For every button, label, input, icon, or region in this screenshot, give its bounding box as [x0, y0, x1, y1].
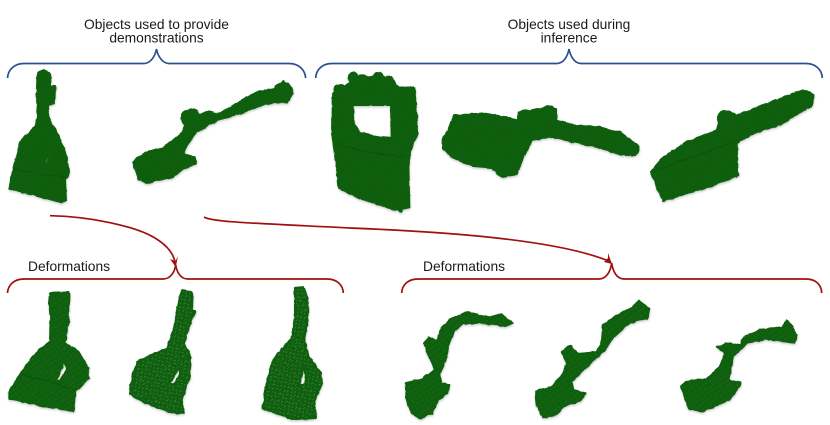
- object: inference tool right: [651, 90, 814, 201]
- title: objects used to provide demonstrations: demonstrations: [109, 30, 204, 46]
- object: demonstration flat tool: [134, 81, 293, 183]
- deformed bottle C: [263, 287, 322, 419]
- title: objects used during inference: inference: [541, 30, 598, 46]
- deformed bottle A: [9, 292, 89, 411]
- arrow: bottle to deformations: [50, 216, 178, 267]
- deformed bottle B: [130, 291, 194, 414]
- object: demonstration bottle: [9, 70, 69, 202]
- object: inference frame: [332, 72, 418, 213]
- object: inference tool middle: [443, 105, 640, 177]
- deformed tool D: [406, 312, 512, 419]
- deformed tool F: [681, 320, 797, 411]
- deformed tool E: [536, 301, 649, 417]
- arrow: tool to deformations: [204, 217, 612, 264]
- red bracket: left deformations: [8, 265, 343, 293]
- title: objects used during inference: Objects used during: [508, 17, 630, 32]
- blue bracket: demonstration objects: [8, 49, 306, 78]
- label: deformations right: Deformations: [423, 259, 505, 274]
- blue bracket: inference objects: [316, 49, 822, 78]
- red bracket: right deformations: [402, 263, 822, 293]
- label: deformations left: Deformations: [28, 259, 110, 274]
- title: objects used to provide demonstrations: Objects used to provide: [84, 17, 229, 32]
